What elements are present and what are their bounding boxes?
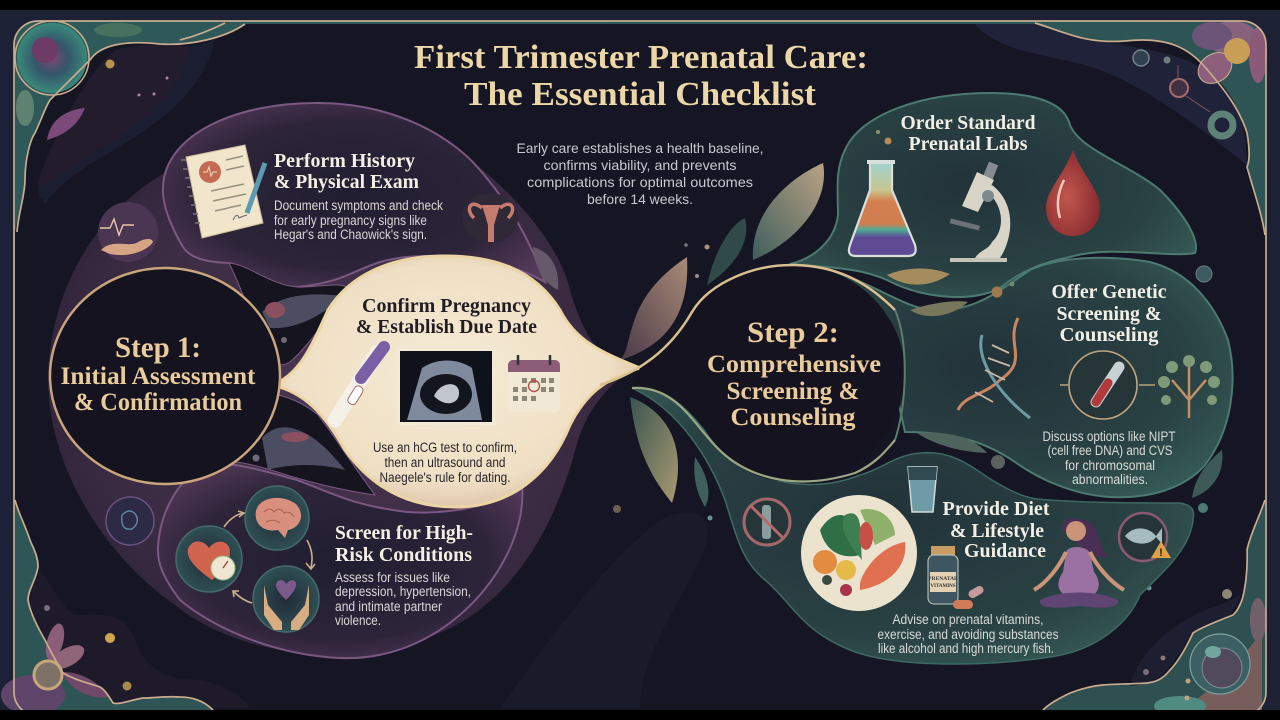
- step 2 right outline: [895, 310, 905, 440]
- icon: notebook and pen: [181, 145, 265, 238]
- heading: perform history: [274, 150, 419, 193]
- heading: genetic: Offer Genetic: [1052, 281, 1166, 303]
- heading: step 2: Counseling: [730, 404, 856, 431]
- leaf: large upper: [753, 163, 824, 260]
- connector dots: [991, 266, 1212, 513]
- intro text: before 14 weeks.: [587, 191, 693, 207]
- icon: calendar: [508, 355, 560, 412]
- heading: step 1: [60, 331, 256, 416]
- petal accents: [252, 294, 345, 470]
- panel shape: genetic screening: [800, 258, 1233, 497]
- title: First Trimester Prenatal Care:: [414, 39, 868, 76]
- step 2 green outline: [632, 388, 895, 481]
- icon: uterus: [462, 193, 518, 243]
- leaf: grey right of exam blob: [533, 247, 558, 290]
- icon: hand with heartbeat: [98, 202, 158, 262]
- leaf: gap between genetic and diet: [917, 432, 987, 453]
- panel: screen for high-risk conditions: [158, 464, 522, 658]
- heading: diet: Guidance: [964, 540, 1046, 562]
- wave: top right blue: [975, 24, 1247, 165]
- text: diet body: [878, 612, 1059, 656]
- title: The Essential Checklist: [464, 76, 817, 113]
- heading: order labs: Prenatal Labs: [908, 133, 1028, 155]
- heading: screen for high-risk: [335, 522, 473, 566]
- text: genetic body: [1042, 429, 1176, 487]
- leaf: lab lower: [910, 301, 968, 316]
- heading: screen for high-risk: Risk Conditions: [335, 544, 472, 566]
- wave: bottom left hump: [28, 570, 250, 708]
- heading: step 1: Initial Assessment: [60, 363, 256, 390]
- wave: top left blue: [38, 40, 215, 205]
- intro text: complications for optimal outcomes: [527, 174, 753, 190]
- content: diet and lifestyle: [744, 467, 1171, 656]
- bubble: bottom right: [1154, 598, 1266, 716]
- heading: order labs: [900, 112, 1036, 155]
- text: genetic body: (cell free DNA) and CVS: [1048, 443, 1172, 458]
- icon: vitamin bottle and pills: [928, 546, 985, 609]
- heading: step 1: Step 1:: [115, 331, 201, 364]
- icon: test tube circle: [1060, 351, 1155, 419]
- icon: vitamin bottle and pills: PRENATAL: [928, 576, 958, 582]
- icon: brain bubble: [245, 486, 309, 550]
- icon: water glass: [908, 467, 937, 512]
- text: screen body: Assess for issues like: [335, 570, 450, 585]
- text: confirm body: Naegele's rule for dating.: [380, 470, 510, 485]
- notch: upper dark gap: [229, 263, 352, 365]
- icon: family tree: [1158, 355, 1220, 418]
- cell cluster: top right: [1133, 50, 1233, 136]
- intro text: confirms viability, and prevents: [544, 157, 736, 173]
- icon: meditating pregnant woman: [1034, 519, 1124, 608]
- heading: confirm pregnancy: Confirm Pregnancy: [362, 295, 532, 317]
- icon: microscope: [950, 162, 1010, 262]
- icon: no alcohol: [744, 499, 790, 545]
- intro text: Early care establishes a health baseline,: [516, 140, 764, 156]
- leaf: purple tan: [620, 257, 687, 360]
- intro text: [516, 140, 764, 207]
- circle: step 1: [50, 268, 280, 484]
- panel shape: prenatal labs: [790, 93, 1196, 297]
- icon: blood drop: [1046, 150, 1100, 236]
- heading: step 1: & Confirmation: [74, 389, 242, 416]
- panel shape: diet and lifestyle: [632, 388, 1194, 664]
- wave: top left plum: [38, 44, 190, 200]
- heading: perform history: & Physical Exam: [274, 171, 419, 193]
- leaf: lower: [630, 397, 678, 503]
- heading: step 2: Comprehensive: [707, 351, 881, 378]
- leaf: small upper: [707, 218, 746, 285]
- heading: order labs: Order Standard: [900, 112, 1036, 134]
- heading: step 2: [707, 316, 881, 431]
- heading: step 2: Step 2:: [747, 316, 839, 349]
- text: perform history body: Document symptoms and check: [274, 198, 443, 213]
- icon: DNA helix: [958, 318, 1030, 418]
- step 2 gold outline: [600, 265, 895, 385]
- heading: diet: Provide Diet: [942, 498, 1050, 520]
- heading: genetic: Counseling: [1060, 324, 1159, 346]
- heading: diet: [942, 498, 1050, 562]
- icon: ultrasound image: [397, 348, 495, 425]
- flower: top right: [1192, 21, 1267, 90]
- heading: confirm pregnancy: & Establish Due Date: [356, 316, 537, 338]
- text: screen body: [335, 570, 471, 628]
- icon: vitamin bottle and pills: VITAMINS: [930, 584, 956, 589]
- content: genetic screening: [958, 281, 1220, 487]
- content: order standard prenatal labs: [849, 112, 1100, 262]
- icon: fish warning: [1119, 513, 1171, 561]
- icon: heart and gauge bubble: [176, 526, 242, 592]
- text: genetic body: Discuss options like NIPT: [1042, 429, 1176, 444]
- heading: perform history: Perform History: [274, 150, 416, 172]
- leaf: small lower: [694, 457, 708, 507]
- text: screen body: and intimate partner: [335, 599, 442, 614]
- wave: lower centre: [500, 512, 708, 708]
- heading: step 2: Screening &: [726, 378, 860, 405]
- text: perform history body: [274, 198, 443, 242]
- panel: step 1 purple backdrop: [48, 116, 630, 654]
- text: confirm body: then an ultrasound and: [384, 455, 506, 470]
- flower: bottom left: [1, 622, 110, 715]
- text: diet body: exercise, and avoiding substances: [878, 627, 1059, 642]
- title: [414, 39, 868, 113]
- orb: top left: [15, 21, 142, 126]
- icon: small cell bubble: [106, 497, 154, 545]
- notch: lower dark gap: [232, 394, 375, 495]
- leaf: right edge: [1192, 450, 1223, 498]
- icon: food plate: [801, 495, 917, 611]
- leaves: central stems: [620, 163, 1223, 507]
- icon: pregnancy test: [335, 347, 384, 420]
- heading: confirm pregnancy: [356, 295, 537, 338]
- text: confirm body: [373, 440, 517, 485]
- icon: flask: [849, 130, 916, 256]
- leaf: lab gold: [887, 268, 950, 285]
- text: screen body: depression, hypertension,: [335, 584, 471, 599]
- text: perform history body: Hegar's and Chaowick's sign.: [274, 227, 427, 242]
- text: screen body: violence.: [335, 613, 381, 628]
- heading: diet: & Lifestyle: [950, 520, 1044, 542]
- panel: perform history and physical exam: [163, 103, 545, 287]
- text: genetic body: for chromosomal: [1065, 458, 1155, 473]
- panel: step 2 green blobs: [632, 93, 1233, 664]
- heading: screen for high-risk: Screen for High-: [335, 522, 473, 544]
- text: diet body: like alcohol and high mercury fish.: [878, 641, 1054, 656]
- circle: step 2: [600, 265, 905, 482]
- text: genetic body: abnormalities.: [1072, 472, 1148, 487]
- arrows: risk cycle: [224, 511, 315, 603]
- heading: genetic: Screening &: [1056, 303, 1162, 325]
- leaf: top left purple: [47, 108, 85, 140]
- text: confirm body: Use an hCG test to confirm,: [373, 440, 517, 455]
- heading: genetic: [1052, 281, 1166, 346]
- text: perform history body: for early pregnancy signs like: [274, 213, 427, 228]
- text: diet body: Advise on prenatal vitamins,: [892, 612, 1044, 627]
- wave: lower right: [1130, 595, 1240, 686]
- icon: hands and broken heart bubble: [253, 566, 319, 632]
- icon: fish warning: !: [1159, 547, 1163, 559]
- panel: confirm pregnancy and due date: [272, 256, 640, 507]
